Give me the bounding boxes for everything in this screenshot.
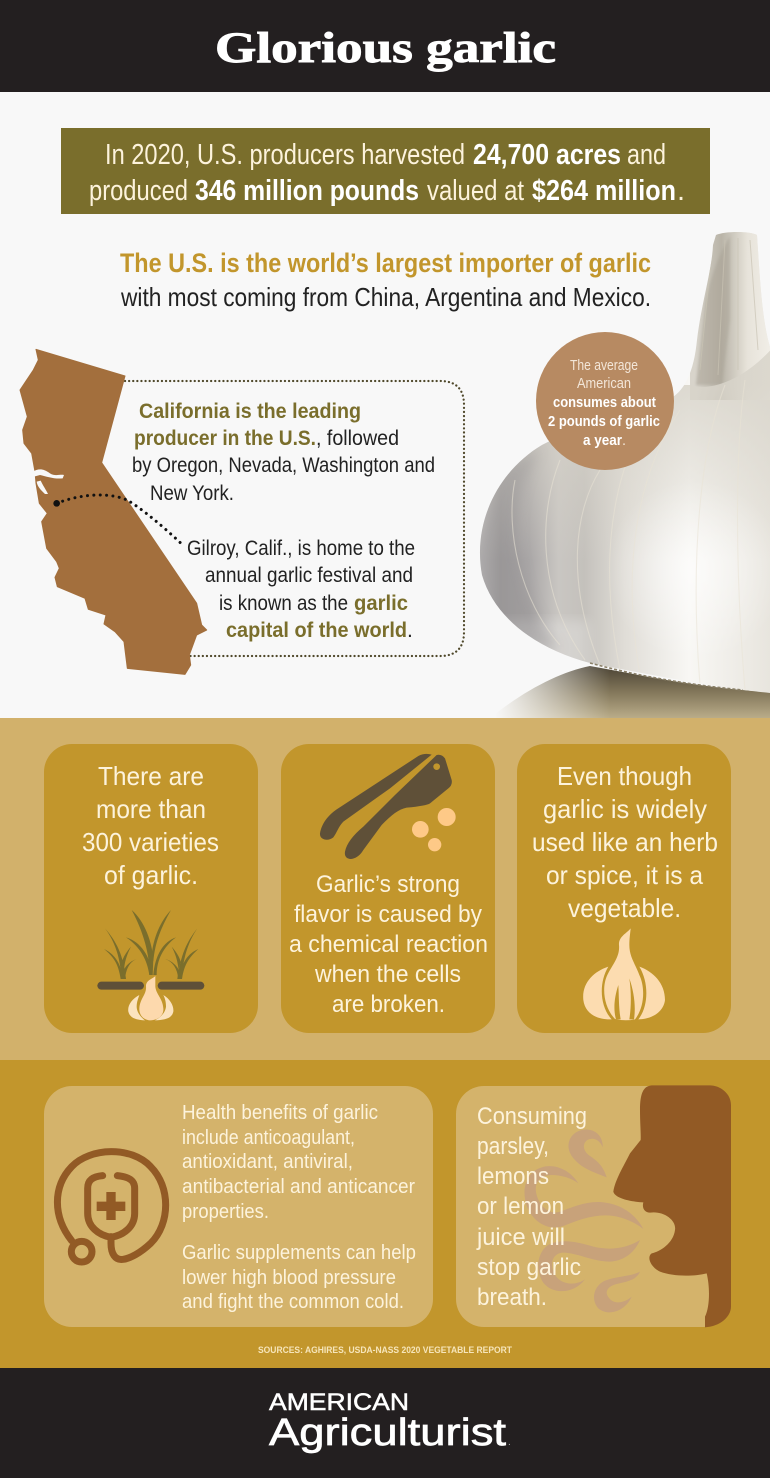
sources: SOURCES: AGHIRES, USDA-NASS 2020 VEGETABLE REPORT — [258, 1345, 512, 1356]
logo: . — [508, 1437, 511, 1448]
panel: garlic breath: stop garlic — [477, 1254, 581, 1281]
panel: vegetable: or spice, it is a — [546, 860, 704, 890]
callout: consumption circle: consumes about — [553, 395, 656, 411]
callout: consumption circle: 2 pounds of garlic — [548, 414, 660, 430]
marker line to Gilroy — [57, 495, 182, 544]
heading: largest importer: The U.S. is the world’s largest importer of garlic — [120, 248, 651, 278]
icon: garlic bulb — [583, 928, 665, 1020]
panel: varieties: 300 varieties — [82, 827, 219, 857]
title: Glorious garlic — [215, 25, 556, 72]
text block: leading producer: New York. — [150, 482, 234, 505]
text block: Gilroy: Gilroy, Calif., is home to the — [187, 537, 415, 560]
footer band — [0, 1368, 770, 1478]
icon: breath swirls — [524, 1129, 643, 1312]
text block: Gilroy: capital of the world — [226, 619, 407, 642]
text block: leading producer: producer in the U.S. — [134, 427, 316, 450]
band: tan facts section — [0, 718, 770, 1060]
logo: AMERICAN — [269, 1389, 409, 1416]
table shadow — [490, 660, 770, 718]
banner: harvest statistics: . — [677, 175, 685, 207]
text block: leading producer: by Oregon, Nevada, Washington and — [132, 454, 435, 477]
panel: flavor — [281, 744, 495, 1033]
text block: Gilroy: annual garlic festival and — [205, 564, 413, 587]
panel: varieties: of garlic. — [104, 860, 198, 890]
callout: consumption circle — [536, 332, 674, 470]
panel: garlic breath: lemons — [477, 1163, 549, 1190]
panel: health benefits: lower high blood pressure — [182, 1267, 396, 1289]
text block: leading producer — [132, 400, 435, 505]
panel: flavor: are broken. — [332, 991, 445, 1018]
panel: garlic breath: or lemon — [477, 1193, 564, 1220]
panel: vegetable: used like an herb — [532, 827, 718, 857]
callout: consumption circle: . — [622, 433, 626, 449]
panel: flavor: flavor is caused by — [294, 901, 482, 928]
panel: vegetable: vegetable. — [568, 893, 681, 923]
panel: garlic breath: parsley, — [477, 1133, 549, 1160]
panel: vegetable: garlic is widely — [543, 794, 707, 824]
panel: vegetable: Even though — [557, 761, 692, 791]
callout: consumption circle: a year — [583, 433, 622, 449]
panel: flavor: a chemical reaction — [289, 931, 488, 958]
heading: largest importer: with most coming from China, Argentina and Mexico. — [120, 282, 651, 312]
panel: varieties — [44, 744, 258, 1033]
map: California — [20, 349, 207, 674]
text block: Gilroy: garlic — [354, 592, 408, 615]
panel: health benefits: antioxidant, antiviral, — [182, 1151, 353, 1173]
bulb body — [470, 225, 770, 700]
panel: flavor: when the cells — [314, 961, 461, 988]
panel: vegetable — [517, 744, 731, 1033]
banner: harvest statistics: and — [627, 139, 666, 171]
root plate — [590, 663, 743, 690]
panel: garlic breath: Consuming — [477, 1103, 587, 1130]
icon: garlic press — [320, 754, 456, 859]
banner: harvest statistics: produced — [89, 175, 188, 207]
callout: consumption circle: American — [577, 376, 631, 392]
heading: largest importer — [120, 248, 651, 312]
panel: health benefits: Garlic supplements can help — [182, 1242, 416, 1264]
background: page — [0, 92, 770, 718]
icon: face profile — [613, 1085, 731, 1327]
panel: garlic breath — [456, 1085, 731, 1327]
photo: garlic bulb — [470, 225, 770, 718]
icon: stethoscope — [57, 1152, 166, 1262]
panel: health benefits: and fight the common cold. — [182, 1291, 404, 1313]
panel: health benefits: Health benefits of garlic — [182, 1102, 378, 1124]
panel: health benefits: properties. — [182, 1201, 269, 1223]
banner: harvest statistics: valued at — [427, 175, 524, 207]
band: gold section — [0, 1060, 770, 1368]
panel: health benefits — [44, 1086, 433, 1327]
text block: Gilroy: is known as the — [219, 592, 348, 615]
banner: harvest statistics: $264 million — [532, 175, 676, 207]
banner: harvest statistics: In 2020, U.S. producers harvested — [105, 139, 465, 171]
panel: health benefits: antibacterial and anticancer — [182, 1176, 415, 1198]
text block: leading producer: California is the leading — [139, 400, 361, 423]
text block: Gilroy — [187, 537, 415, 642]
banner: harvest statistics: 24,700 acres — [473, 139, 621, 171]
text block: Gilroy: . — [407, 619, 413, 642]
panel: garlic breath: juice will — [476, 1224, 565, 1251]
panel: health benefits: include anticoagulant, — [182, 1127, 355, 1149]
panel: garlic breath: breath. — [477, 1284, 547, 1311]
banner: harvest statistics — [61, 128, 710, 214]
icon: garlic plant — [97, 910, 204, 1020]
panel: flavor: Garlic’s strong — [316, 871, 460, 898]
panel: varieties: There are — [98, 761, 204, 791]
dotted callout frame — [125, 381, 464, 656]
logo — [269, 1389, 511, 1454]
callout: consumption circle: The average — [570, 358, 638, 374]
panel: varieties: more than — [96, 794, 206, 824]
header band — [0, 0, 770, 92]
banner: harvest statistics: 346 million pounds — [195, 175, 419, 207]
logo: Agriculturist — [269, 1412, 507, 1454]
text block: leading producer: , followed — [316, 427, 399, 450]
